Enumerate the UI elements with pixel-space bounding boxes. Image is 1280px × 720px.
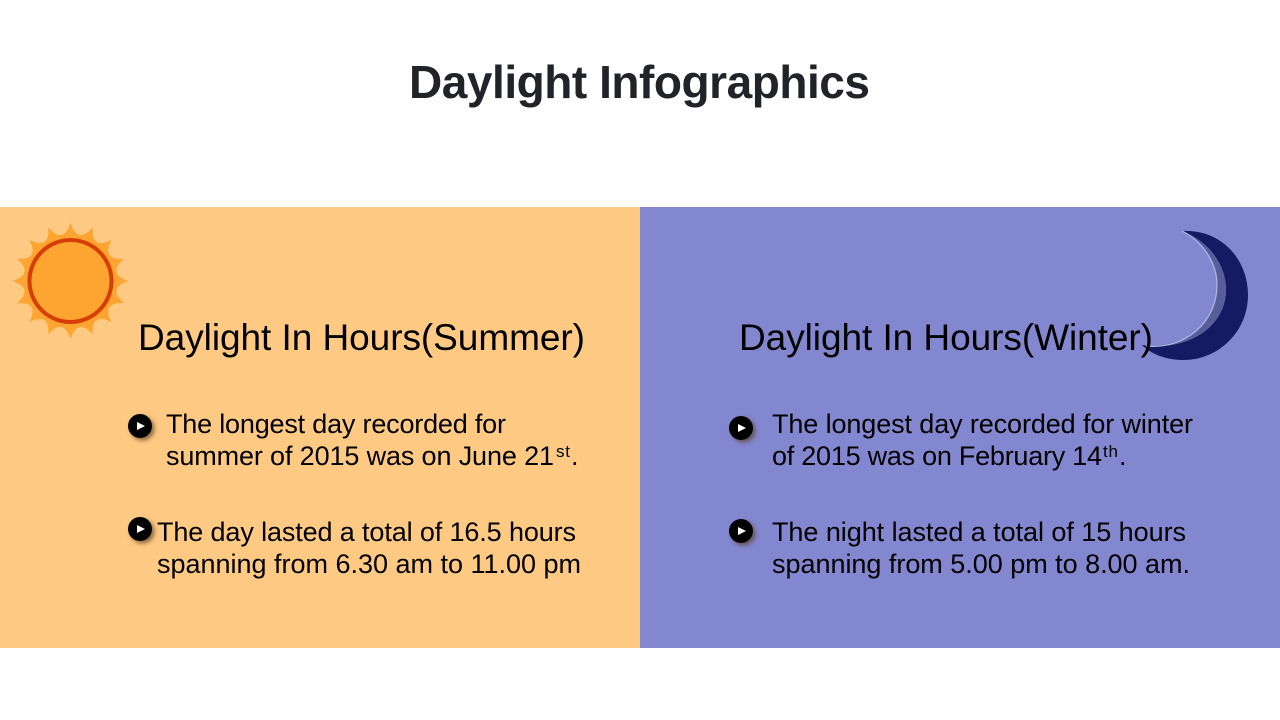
title: Daylight Infographics [409, 56, 870, 108]
text: winter duration [772, 517, 1190, 579]
bullet: winter 1 [729, 416, 753, 440]
text: summer longest day: st [556, 442, 570, 461]
icon: crescent moon [1142, 231, 1248, 360]
text: summer duration [157, 517, 581, 579]
text: winter longest day: . [1119, 441, 1127, 471]
text: winter longest day: th [1103, 442, 1118, 461]
text: summer longest day: . [571, 441, 579, 471]
text: summer duration: spanning from 6.30 am to 11.00 pm [157, 549, 581, 579]
bullet: summer 1 [128, 414, 152, 438]
text: winter duration: The night lasted a total of 15 hours [772, 517, 1186, 547]
bullet: summer 2 [128, 517, 152, 541]
text: summer longest day: summer of 2015 was on June 21 [166, 441, 554, 471]
text: winter duration: spanning from 5.00 pm to 8.00 am. [772, 549, 1190, 579]
text: summer longest day: The longest day recorded for [166, 409, 506, 439]
text: summer longest day [166, 409, 579, 471]
bullet: winter 2 [729, 519, 753, 543]
heading: winter: Daylight In Hours(Winter) [739, 317, 1153, 358]
text: winter longest day: of 2015 was on February 14 [772, 441, 1102, 471]
text: winter longest day [772, 409, 1193, 471]
heading: summer: Daylight In Hours(Summer) [138, 317, 585, 358]
icon: sun [12, 223, 128, 339]
panel: summer [0, 207, 640, 648]
text: winter longest day: The longest day recorded for winter [772, 409, 1193, 439]
text: summer duration: The day lasted a total of 16.5 hours [157, 517, 576, 547]
panel: winter [640, 207, 1280, 648]
